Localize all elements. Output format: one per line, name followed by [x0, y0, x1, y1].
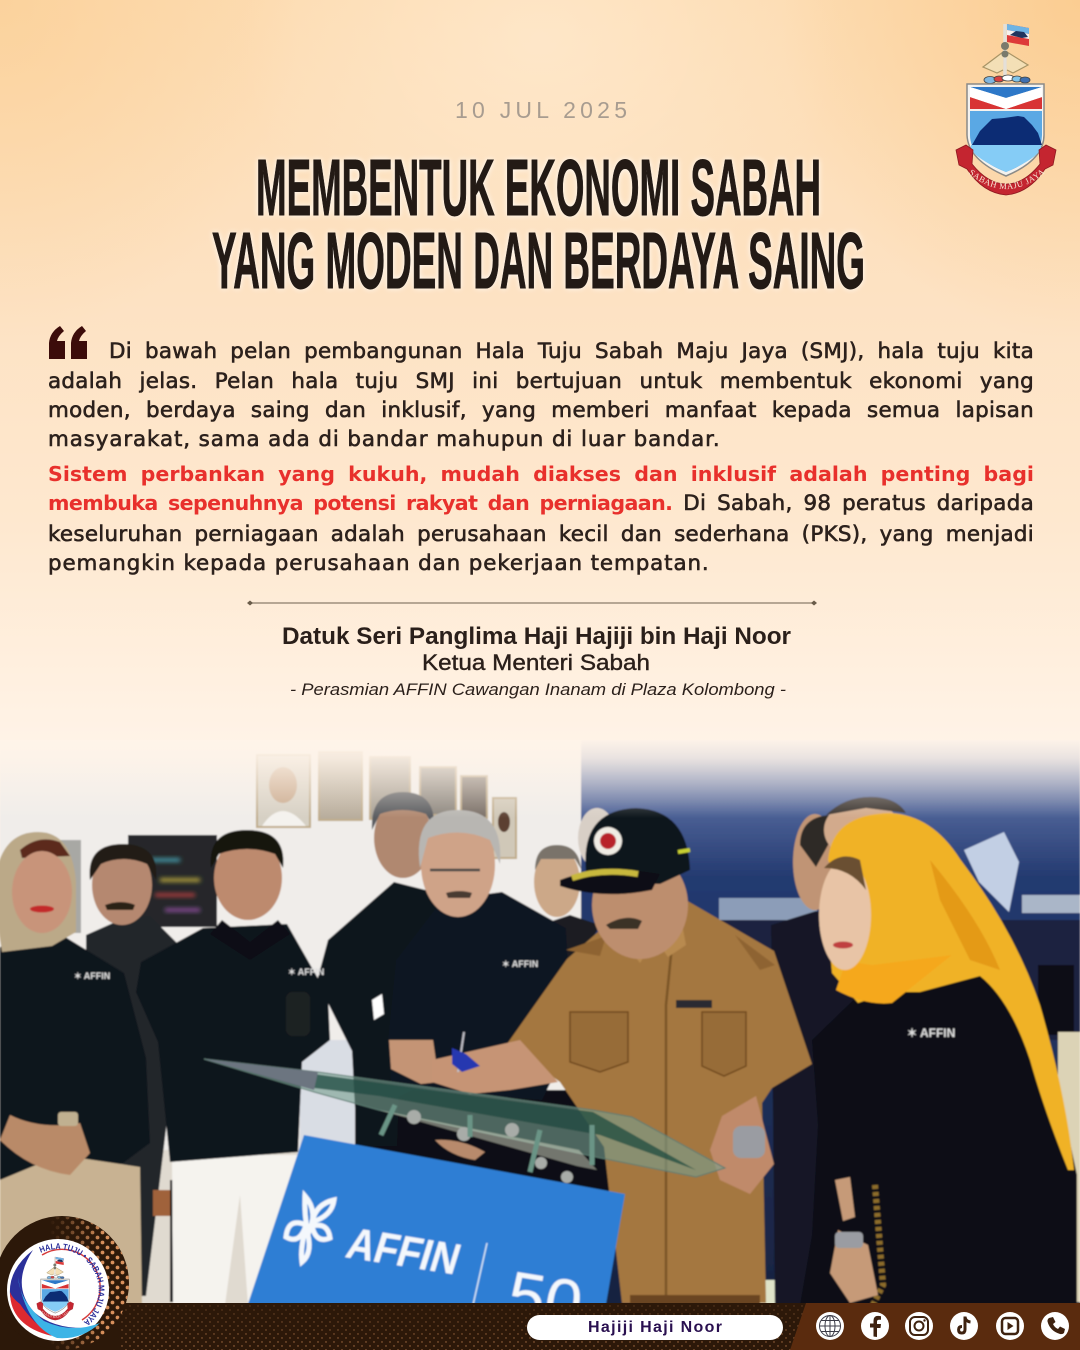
highlighted paragraph: membuka sepenuhnya potensi rakyat dan perniagaan. Di Sabah, 98 peratus daripada — [48, 491, 1034, 516]
state crest — [956, 24, 1056, 196]
highlighted paragraph: pemangkin kepada perusahaan dan pekerjaan tempatan. — [48, 551, 710, 576]
person 1 woman left — [0, 935, 150, 1183]
photo: AFFIN signing ceremony — [0, 746, 1080, 1303]
blue AFFIN sign — [246, 1135, 625, 1310]
logo badge: HALA TUJU • SABAH MAJU JAYA — [39, 1243, 104, 1325]
person 3 young man — [172, 1155, 302, 1305]
name pill: Hajiji Haji Noor — [588, 1319, 722, 1336]
main figure brown uniform — [507, 899, 812, 1303]
icon: globe — [816, 1312, 844, 1340]
quote text block — [48, 339, 1034, 452]
photo: AFFIN signing ceremony: ✶ AFFIN — [502, 959, 538, 969]
footer bar — [0, 1216, 1080, 1350]
title — [210, 143, 866, 305]
highlighted paragraph: Sistem perbankan yang kukuh, mudah diakses dan inklusif adalah penting bagi — [48, 462, 1034, 486]
background glow — [0, 0, 1080, 760]
person 4 tall man behind — [316, 881, 438, 1148]
back men centre — [578, 807, 610, 862]
person 2 behind — [86, 916, 180, 1296]
icon: video — [996, 1312, 1024, 1340]
attribution: - Perasmian AFFIN Cawangan Inanam di Plaza Kolombong - — [290, 680, 786, 699]
person 5 glasses man — [388, 892, 572, 1100]
shirt logos: ✶ AFFIN — [74, 971, 110, 981]
quote text block: Di bawah pelan pembangunan Hala Tuju Sabah Maju Jaya (SMJ), hala tuju kita — [109, 339, 1034, 364]
icon: tiktok — [950, 1312, 978, 1340]
pen — [458, 1032, 464, 1072]
highlighted paragraph: keseluruhan perniagaan adalah perusahaan kecil dan sederhana (PKS), yang menjadi — [48, 522, 1034, 547]
icon: phone — [1041, 1312, 1069, 1340]
woman right — [800, 955, 1077, 1305]
photo: AFFIN signing ceremony: 50 — [503, 1257, 587, 1341]
quote text block: moden, berdaya saing dan inklusif, yang memberi manfaat kepada semua lapisan — [48, 398, 1034, 423]
attribution: Datuk Seri Panglima Haji Hajiji bin Haji Noor — [282, 623, 791, 650]
photo: AFFIN signing ceremony: ✶ AFFIN — [907, 1026, 955, 1040]
name pill — [527, 1315, 783, 1340]
wall frames — [257, 752, 516, 858]
attribution: Ketua Menteri Sabah — [422, 650, 650, 675]
quote text block: masyarakat, sama ada di bandar mahupun di luar bandar. — [48, 427, 721, 452]
photo: AFFIN signing ceremony: ✶ AFFIN — [288, 967, 324, 977]
attribution — [247, 600, 817, 699]
icon: facebook — [861, 1312, 889, 1340]
quote text block: adalah jelas. Pelan hala tuju SMJ ini bertujuan untuk membentuk ekonomi yang — [48, 369, 1034, 394]
date: 10 JUL 2025 — [455, 97, 627, 123]
icon: instagram — [905, 1312, 933, 1340]
highlighted paragraph — [48, 462, 1034, 576]
back men right — [771, 910, 854, 1303]
photo: AFFIN signing ceremony: AFFIN — [341, 1220, 466, 1284]
logo badge — [0, 1216, 129, 1350]
icon: quotation mark — [49, 326, 87, 359]
podium glass — [204, 1059, 725, 1177]
